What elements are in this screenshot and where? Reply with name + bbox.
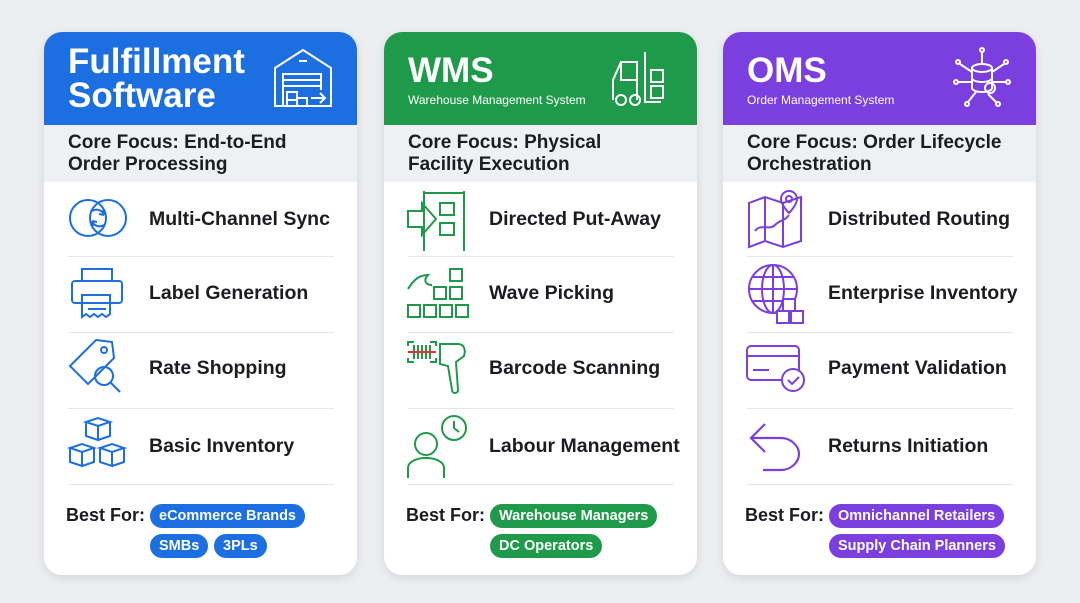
row: payment validation — [746, 345, 1007, 392]
row: labour management: Labour Management — [489, 435, 680, 457]
best for: Best For: — [406, 505, 485, 525]
pill: SMBs: SMBs — [159, 538, 199, 554]
header: wms — [384, 32, 697, 125]
row: labour management — [407, 415, 680, 478]
title: WMS — [408, 51, 494, 90]
row: payment validation: Payment Validation — [828, 357, 1007, 379]
row: directed put-away — [407, 191, 661, 251]
pill: Supply Chain Planners — [829, 534, 1005, 558]
row: directed put-away: Directed Put-Away — [489, 208, 661, 230]
pill: Warehouse Managers: Warehouse Managers — [499, 508, 648, 524]
pill: Omnichannel Retailers: Omnichannel Retailers — [838, 508, 995, 524]
card: oms — [723, 32, 1036, 575]
row: basic inventory — [67, 417, 294, 468]
row: returns initiation: Returns Initiation — [828, 435, 988, 457]
row: wave picking — [407, 268, 614, 318]
core focus: Core Focus: Physical — [408, 132, 601, 153]
row: distributed routing — [748, 190, 1010, 248]
row: rate shopping: Rate Shopping — [149, 357, 287, 379]
pill: 3PLs — [214, 534, 267, 558]
row: distributed routing: Distributed Routing — [828, 208, 1010, 230]
core focus: Core Focus: Order Lifecycle — [747, 132, 1001, 153]
best for: Best For: — [745, 505, 824, 525]
row: wave picking: Wave Picking — [489, 282, 614, 304]
pill: SMBs — [150, 534, 208, 558]
card: wms — [384, 32, 697, 575]
pill: DC Operators: DC Operators — [499, 538, 593, 554]
pill: Warehouse Managers — [490, 504, 657, 528]
icon: forklift — [612, 52, 664, 106]
row: label generation — [71, 268, 308, 319]
row: barcode scanning: Barcode Scanning — [489, 357, 660, 379]
card: fulfillment software — [44, 32, 357, 575]
row: returns initiation — [750, 423, 988, 472]
pill: DC Operators — [490, 534, 602, 558]
row: barcode scanning — [407, 341, 660, 394]
row: multi-channel sync — [69, 199, 330, 237]
core focus — [723, 125, 1036, 182]
title: Software — [68, 76, 216, 115]
pill: eCommerce Brands: eCommerce Brands — [159, 508, 296, 524]
title: Fulfillment — [68, 42, 245, 81]
pill: eCommerce Brands — [150, 504, 305, 528]
core focus: Orchestration — [747, 154, 872, 175]
title — [68, 42, 245, 115]
core focus — [44, 125, 357, 182]
header: oms — [723, 32, 1036, 125]
header: fulfillment — [44, 32, 357, 125]
row: enterprise inventory: Enterprise Inventory — [828, 282, 1018, 304]
row: multi-channel sync: Multi-Channel Sync — [149, 208, 330, 230]
title: OMS — [747, 51, 827, 90]
pill: 3PLs: 3PLs — [223, 538, 258, 554]
row: enterprise inventory — [748, 264, 1018, 324]
icon: warehouse — [274, 48, 332, 107]
core focus: Facility Execution — [408, 154, 570, 175]
row: label generation: Label Generation — [149, 282, 308, 304]
row: rate shopping — [68, 339, 287, 393]
subtitle: Order Management System — [747, 93, 894, 107]
row: basic inventory: Basic Inventory — [149, 435, 294, 457]
pill: Supply Chain Planners: Supply Chain Planners — [838, 538, 996, 554]
core focus: Core Focus: End-to-End — [68, 132, 286, 153]
core focus: Order Processing — [68, 154, 227, 175]
best for: Best For: — [66, 505, 145, 525]
pill: Omnichannel Retailers — [829, 504, 1004, 528]
icon: database network — [953, 47, 1011, 107]
subtitle: Warehouse Management System — [408, 93, 586, 107]
core focus — [384, 125, 697, 182]
